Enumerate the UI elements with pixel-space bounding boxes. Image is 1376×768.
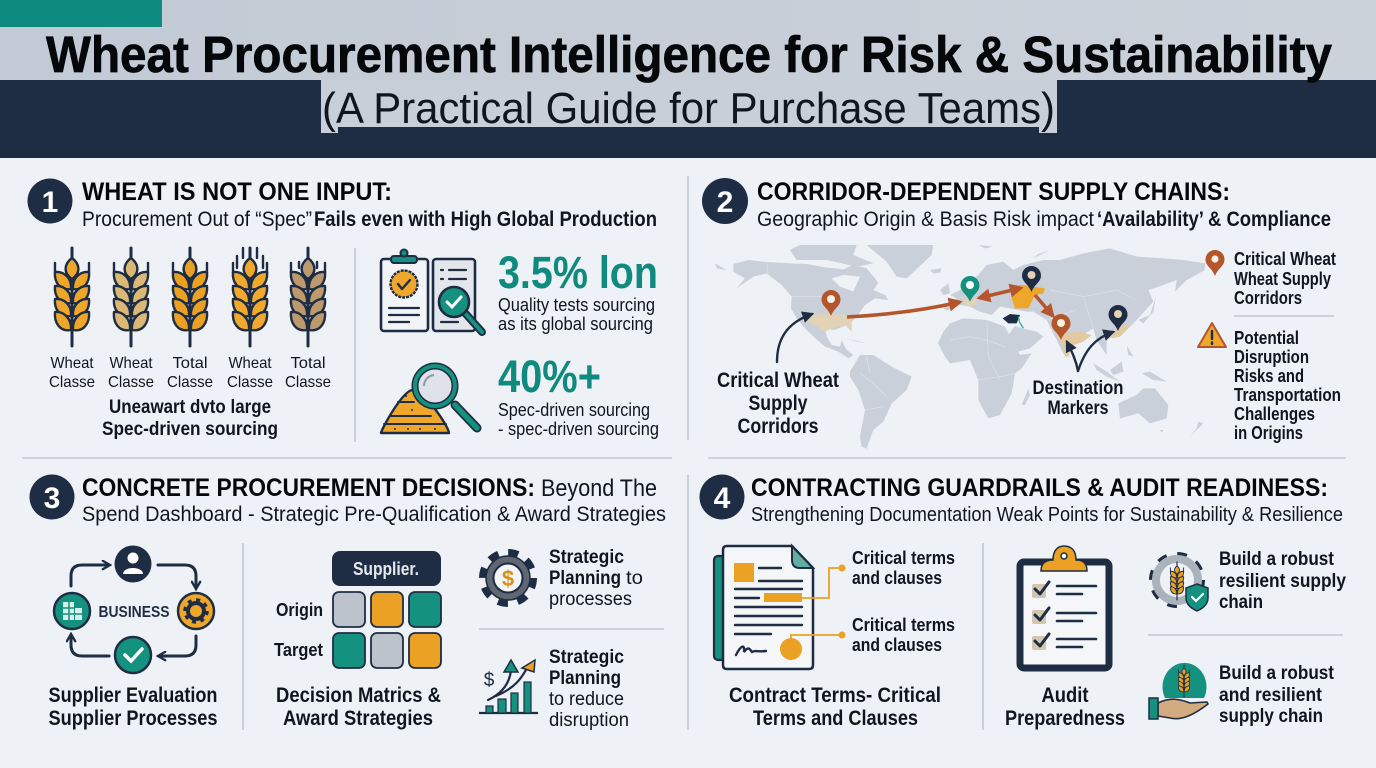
wheat caption [102, 397, 278, 440]
map label: supply corridors: Critical Wheat [717, 369, 839, 392]
stat text 1: Quality tests sourcing [498, 295, 655, 315]
legend text: disruption: Transportation [1234, 385, 1341, 405]
legend text: corridors [1234, 249, 1336, 308]
text: strategic planning 1: to [626, 568, 643, 589]
legend text: disruption: Potential [1234, 328, 1299, 348]
wheat class labels: Total [290, 355, 326, 372]
text: strategic planning 2: Strategic [549, 647, 624, 668]
badge 1 [28, 178, 72, 224]
badge 2 [702, 178, 748, 224]
stat text 2 [498, 400, 659, 439]
legend: pin [1206, 250, 1224, 276]
legend text: disruption: Disruption [1234, 347, 1309, 367]
wheat class labels: Classe [285, 374, 331, 391]
map label: supply corridors [717, 369, 839, 438]
map label: supply corridors: Supply [748, 392, 808, 415]
text: strategic planning 2: to reduce [549, 689, 624, 710]
callout: critical terms 2: Critical terms [852, 615, 955, 635]
icon: quality documents [381, 250, 482, 332]
legend text: disruption: in Origins [1234, 423, 1303, 443]
contract caption: Contract Terms- Critical [729, 684, 941, 707]
legend text: corridors: Wheat Supply [1234, 269, 1331, 289]
panel: section 2 corridor-dependent supply chains [702, 178, 1341, 450]
legend text: corridors: Corridors [1234, 288, 1302, 308]
map label: destination markers: Destination [1032, 378, 1124, 399]
heading 3: CONCRETE PROCUREMENT DECISIONS: [82, 474, 535, 502]
legend text: disruption [1234, 328, 1341, 443]
header banner [0, 0, 1376, 158]
panel: section 1 wheat is not one input [28, 178, 659, 442]
wheat class labels: Classe [227, 374, 273, 391]
stat text 2: Spec-driven sourcing [498, 400, 650, 420]
text: strategic planning 2 [549, 647, 629, 731]
stat: 40%+: 40%+ [498, 351, 601, 402]
callout arrows [777, 314, 1113, 371]
callout: critical terms 1: Critical terms [852, 548, 955, 568]
icon: hand holding wheat [1149, 663, 1208, 719]
icon: growth chart [479, 660, 538, 713]
icon: audit clipboard [1020, 546, 1109, 668]
wheat caption: Uneawart dvto large [109, 397, 271, 418]
callout: critical terms 2 [852, 615, 955, 655]
text: strategic planning 1: processes [549, 589, 632, 610]
text: resilient chain 2: supply chain [1219, 706, 1323, 727]
wheat class labels: Classe [49, 374, 95, 391]
decision matrix [274, 551, 441, 668]
icons: wheat classes [55, 248, 325, 346]
subheading 3: Spend Dashboard - Strategic Pre-Qualification & Award Strategies [82, 503, 666, 526]
audit caption: Preparedness [1005, 707, 1125, 730]
text: strategic planning 1: Planning [549, 568, 621, 589]
icon: gear with dollar: $ [502, 566, 514, 591]
badge 3 [30, 474, 74, 520]
decision matrix: Origin [276, 600, 323, 620]
origin and destination pins [822, 266, 1128, 340]
text: strategic planning 1: Strategic [549, 547, 624, 568]
heading 3: Beyond The [541, 475, 657, 502]
supplier caption: Supplier Evaluation [48, 684, 218, 707]
heading 1: WHEAT IS NOT ONE INPUT: [82, 178, 392, 206]
matrix caption: Award Strategies [283, 707, 433, 730]
icon: gear with dollar [483, 553, 533, 603]
legend text: corridors: Critical Wheat [1234, 249, 1336, 269]
wheat caption: Spec-driven sourcing [102, 419, 278, 440]
contract caption: Terms and Clauses [753, 707, 918, 730]
text: resilient chain 1: Build a robust [1219, 549, 1335, 570]
callout: critical terms 1 [852, 548, 955, 588]
decision matrix: Supplier. [353, 559, 419, 579]
text: strategic planning 1 [549, 547, 643, 610]
wheat class labels [49, 355, 331, 391]
subtitle: (A Practical Guide for Purchase Teams) [322, 84, 1055, 133]
decision matrix: Target [274, 640, 323, 660]
icon: gear wheat shield [1153, 556, 1208, 611]
badge 4: 4 [714, 482, 731, 515]
matrix caption: Decision Matrics & [276, 684, 441, 707]
wheat class labels: Wheat [50, 355, 94, 372]
contract caption [729, 684, 941, 730]
icon: grain pile with magnifier [381, 366, 477, 433]
wheat class labels: Total [172, 355, 208, 372]
stat text 2: - spec-driven sourcing [498, 419, 659, 439]
text: resilient chain 2: and resilient [1219, 685, 1323, 706]
text: resilient chain 2: Build a robust [1219, 663, 1335, 684]
icon: growth chart: $ [484, 670, 495, 691]
icon: contract document [714, 546, 846, 669]
map label: destination markers [1032, 378, 1124, 419]
business label: BUSINESS [98, 604, 170, 621]
world map [715, 245, 1205, 450]
legend text: disruption: Challenges [1234, 404, 1315, 424]
panel: section 3 concrete procurement decisions [30, 474, 666, 731]
matrix caption [276, 684, 441, 730]
heading 4: CONTRACTING GUARDRAILS & AUDIT READINESS: [751, 474, 1328, 502]
heading 2: CORRIDOR-DEPENDENT SUPPLY CHAINS: [757, 178, 1230, 206]
wheat class labels: Classe [167, 374, 213, 391]
subheading 1: Procurement Out of “Spec” [82, 208, 312, 231]
text: resilient chain 1 [1219, 549, 1346, 613]
badge 3: 3 [44, 482, 60, 515]
text: resilient chain 1: chain [1219, 592, 1263, 613]
subheading 2: ‘Availability’ & Compliance [1097, 208, 1331, 231]
callout: critical terms 2: and clauses [852, 635, 942, 655]
map label: destination markers: Markers [1048, 398, 1108, 419]
badge 2: 2 [717, 186, 733, 219]
audit caption: Audit [1042, 684, 1088, 707]
diagram: supplier evaluation cycle [54, 546, 214, 673]
wheat class labels: Wheat [110, 355, 153, 372]
corridor arrows [847, 288, 1053, 317]
icon: warning [1198, 323, 1226, 347]
text: strategic planning 2: Planning [549, 668, 621, 689]
wheat class labels: Classe [108, 374, 154, 391]
badge 1: 1 [42, 186, 58, 219]
panel: section 4 contracting guardrails [700, 474, 1346, 730]
map label: supply corridors: Corridors [738, 415, 818, 438]
callout: critical terms 1: and clauses [852, 568, 942, 588]
text: strategic planning 2: disruption [549, 710, 629, 731]
text: resilient chain 1: resilient supply [1219, 571, 1346, 592]
text: resilient chain 2 [1219, 663, 1335, 727]
supplier caption: Supplier Processes [48, 707, 218, 730]
subheading 2: Geographic Origin & Basis Risk impact [757, 208, 1094, 231]
audit caption [1005, 684, 1125, 730]
legend text: disruption: Risks and [1234, 366, 1304, 386]
wheat class labels: Wheat [228, 355, 272, 372]
badge 4 [700, 474, 744, 520]
stat text 1 [498, 295, 655, 334]
stat text 1: as its global sourcing [498, 314, 653, 334]
supplier caption [48, 684, 218, 730]
subheading 1: Fails even with High Global Production [314, 208, 657, 231]
stat: 3.5%: 3.5% lon [498, 247, 658, 298]
